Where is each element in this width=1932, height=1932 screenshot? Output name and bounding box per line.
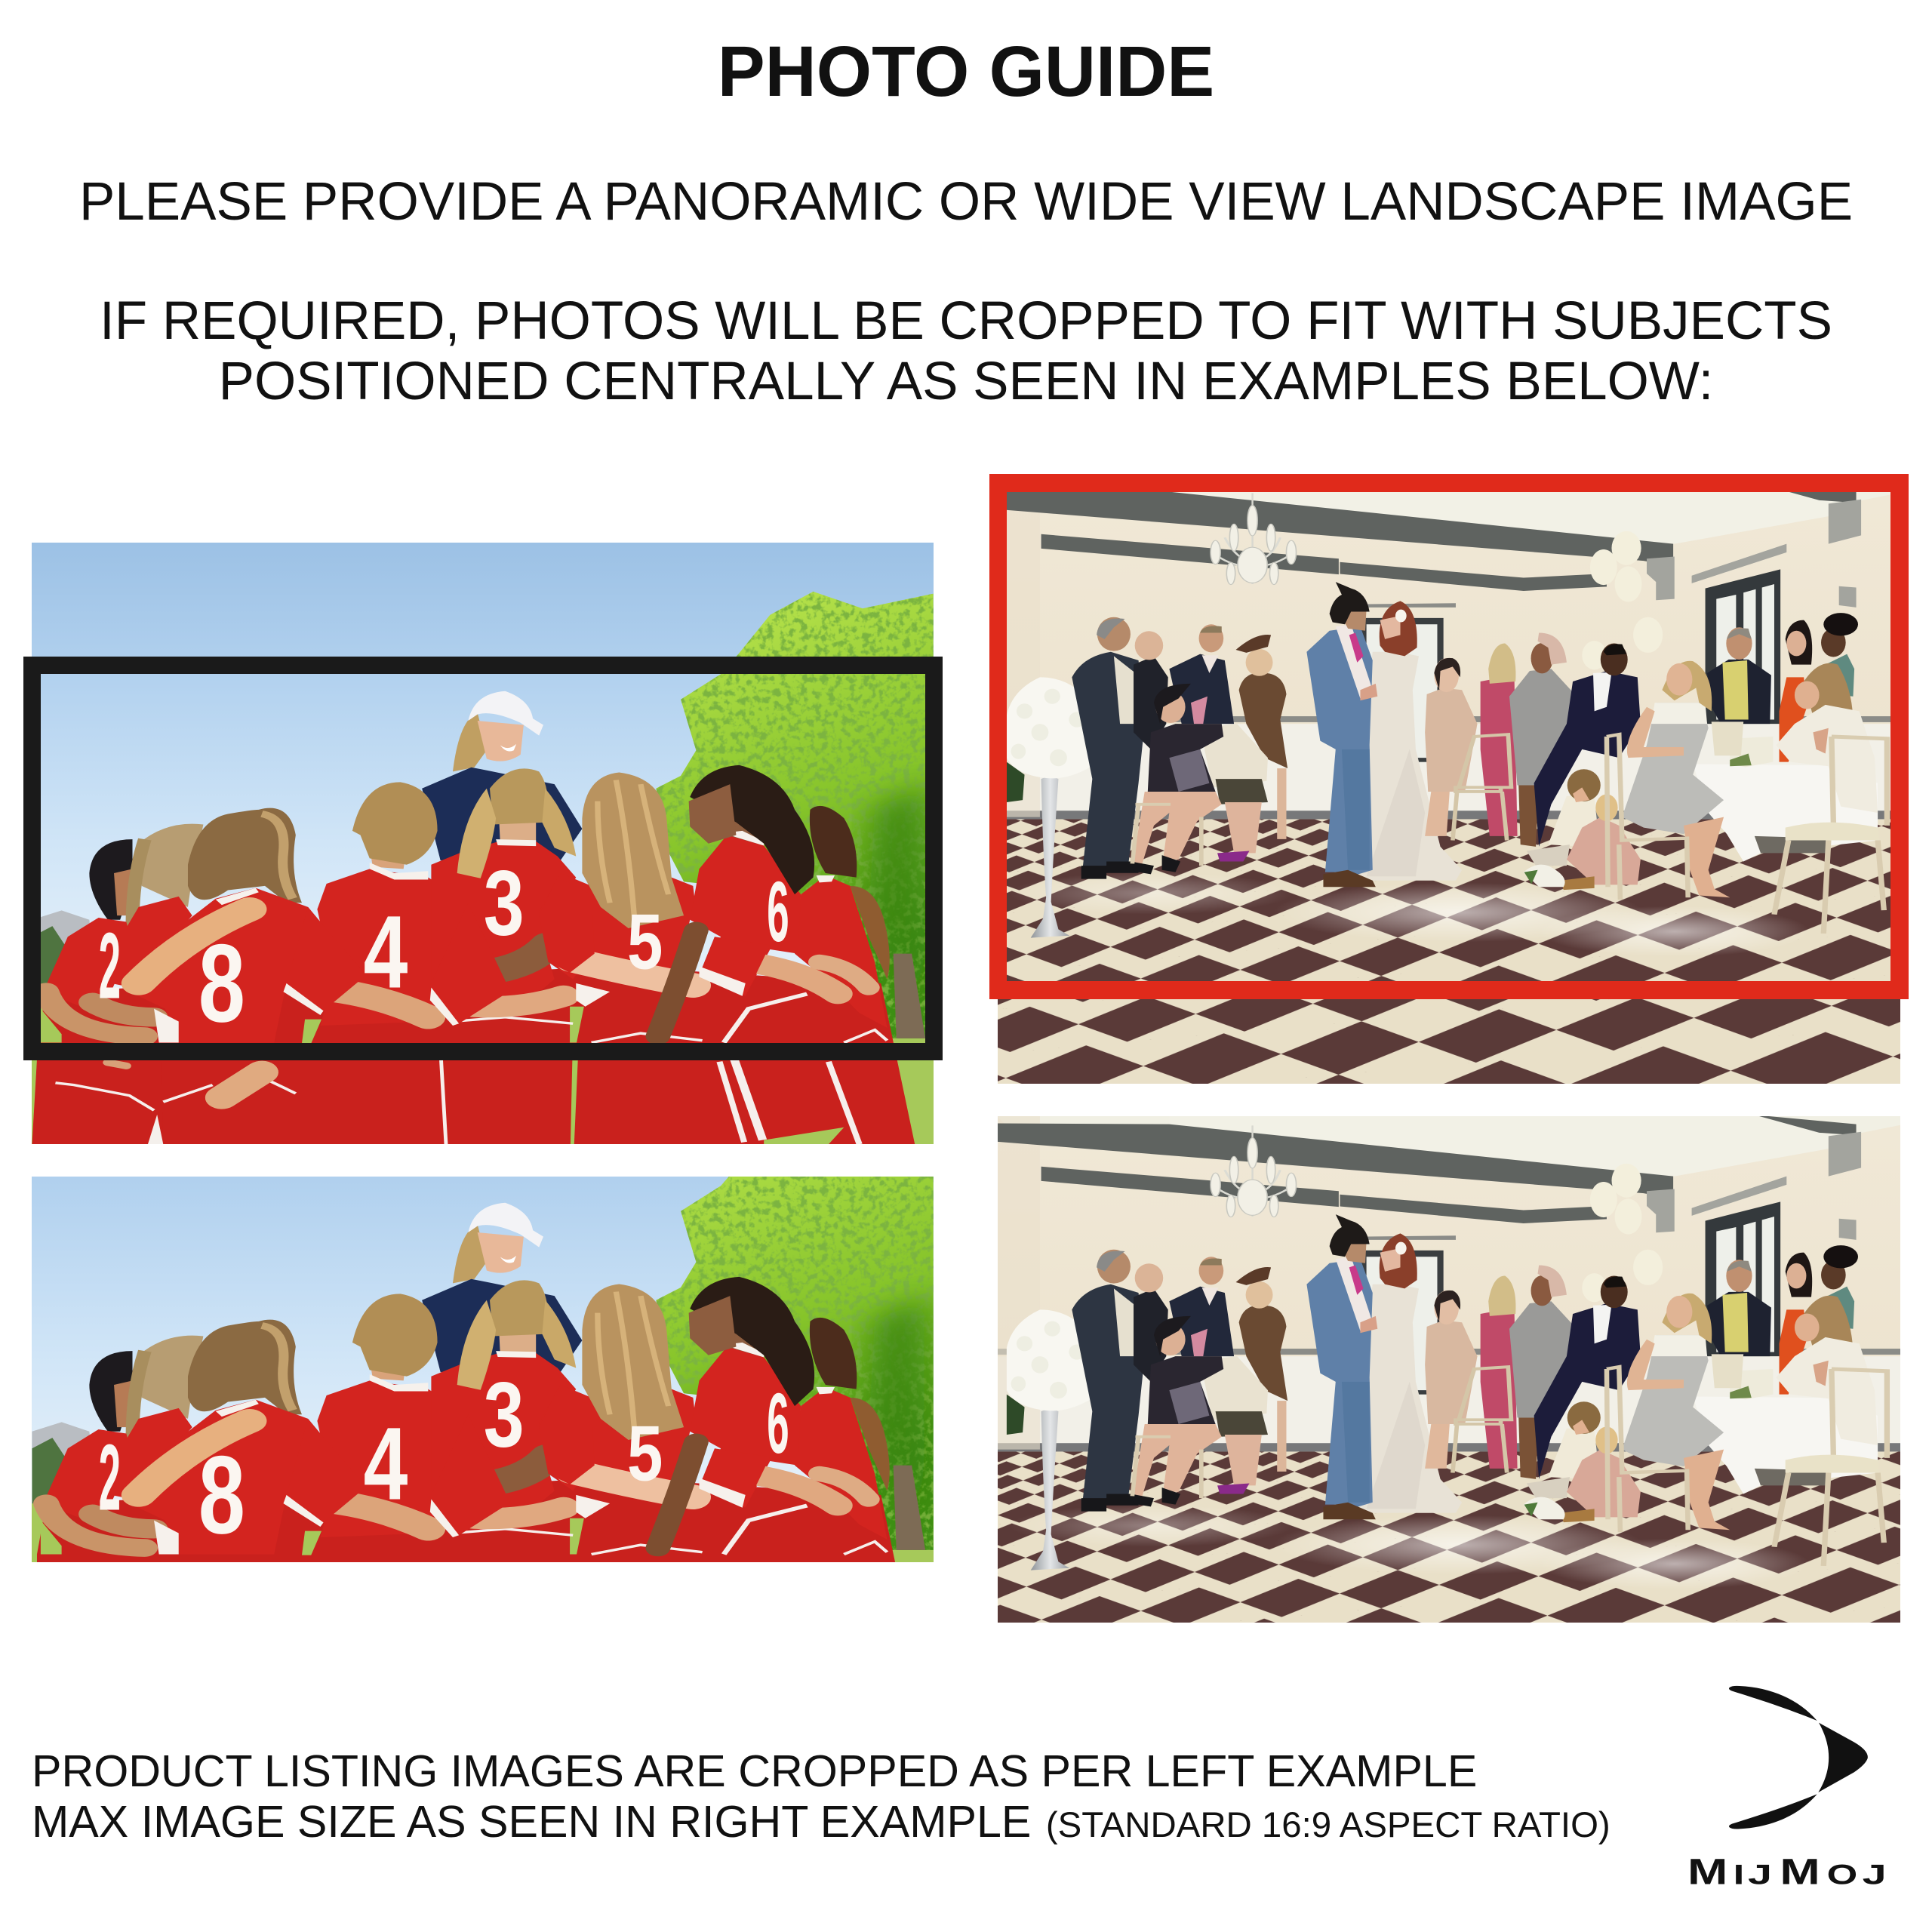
guests right group — [1607, 613, 1887, 934]
jerseys — [43, 835, 887, 1043]
photo: soccer team full image — [32, 543, 934, 1144]
windows — [1342, 569, 1780, 762]
jersey numbers: 5 — [627, 898, 663, 986]
speakers and wall lamps — [1647, 500, 1861, 608]
logo: MijMoj: M — [1780, 1852, 1820, 1893]
photo: wedding full image — [998, 492, 1900, 1084]
instruction: cropping: IF REQUIRED, PHOTOS WILL BE CROPPED TO FIT WITH SUBJECTS — [100, 291, 1832, 351]
logo: MijMoj: I — [1734, 1859, 1744, 1890]
children on floor — [1524, 769, 1641, 890]
shorts stripes — [55, 994, 887, 1144]
jersey numbers: 8 — [198, 921, 245, 1045]
flower arrangement and vase — [1007, 677, 1109, 938]
table with cloth — [1693, 737, 1878, 862]
guests centre group — [1425, 633, 1641, 847]
jersey numbers: 3 — [484, 851, 525, 955]
footer note: PRODUCT LISTING IMAGES ARE CROPPED AS PER LEFT EXAMPLE — [32, 1746, 1477, 1796]
photo: soccer team full image: 6 — [767, 863, 789, 959]
chandelier — [1211, 493, 1297, 585]
logo: MijMoj: J — [1748, 1859, 1772, 1890]
jersey sleeves over arms — [287, 878, 770, 1023]
ceiling beams — [991, 482, 1857, 591]
jersey numbers: 2 — [99, 913, 121, 1018]
balloons — [1582, 531, 1663, 669]
guests left group — [1072, 617, 1287, 879]
instruction: cropping — [100, 291, 1832, 411]
coach — [422, 691, 582, 865]
team shorts — [32, 966, 915, 1144]
jersey collars and trims — [154, 831, 835, 1043]
logo: MijMoj — [1687, 1686, 1887, 1893]
logo: MijMoj: J — [1863, 1859, 1887, 1890]
instruction: cropping: POSITIONED CENTRALLY AS SEEN IN EXAMPLES BELOW: — [219, 352, 1713, 411]
floor reflections — [1009, 872, 1810, 957]
logo: MijMoj: M — [1687, 1852, 1727, 1893]
jersey numbers — [99, 851, 789, 1045]
footer note — [32, 1746, 1611, 1847]
photo: wedding 16:9 max image — [998, 1116, 1900, 1623]
logo: MijMoj: O — [1827, 1859, 1857, 1890]
instruction: panoramic image: PLEASE PROVIDE A PANORAMIC OR WIDE VIEW LANDSCAPE IMAGE — [79, 172, 1853, 232]
black crop frame — [23, 657, 943, 1060]
jersey numbers: 4 — [364, 894, 408, 1010]
red crop frame — [989, 474, 1909, 999]
bride and groom — [1306, 582, 1462, 887]
title: PHOTO GUIDE — [718, 32, 1214, 111]
arms — [46, 909, 869, 1097]
tree — [656, 592, 934, 1038]
room walls and ceiling — [991, 478, 1909, 819]
photo: soccer team cropped — [32, 1177, 934, 1562]
footer note: MAX IMAGE SIZE AS SEEN IN RIGHT EXAMPLE (STANDARD 16:9 ASPECT RATIO) — [32, 1796, 1611, 1847]
players' hair and heads — [89, 782, 764, 926]
front hair over jerseys — [457, 765, 890, 979]
